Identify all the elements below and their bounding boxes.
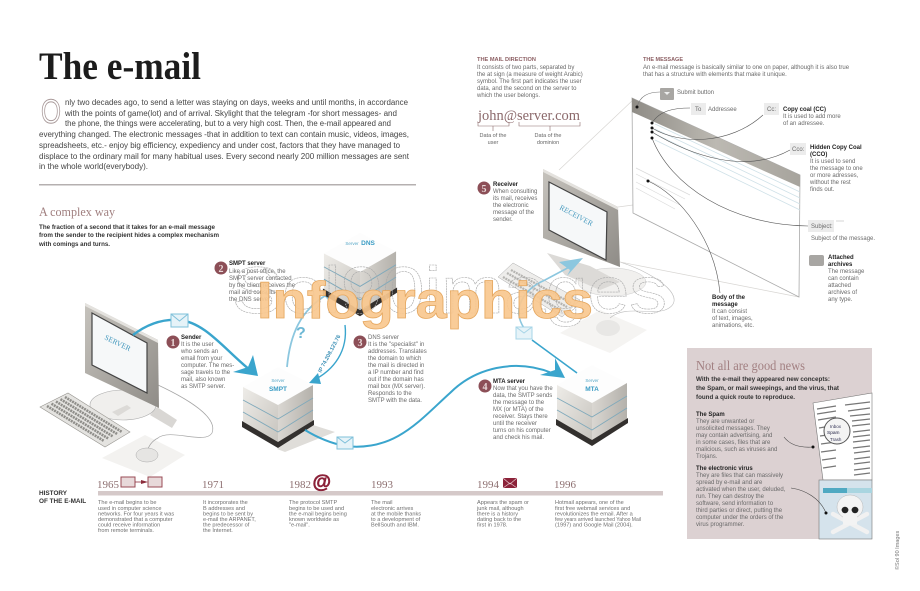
step 1: sender: It is the user <box>181 342 214 348</box>
step 5: receiver: its mail, receives <box>493 196 537 202</box>
1982 entry: The protocol SMTP <box>289 500 337 506</box>
timeline label: HISTORY <box>39 490 68 497</box>
1994 entry: Appears the spam or <box>477 500 529 506</box>
DNS server: Server <box>345 241 359 246</box>
MTA server: Server <box>585 378 599 383</box>
panel: the mail direction: symbol. The first part indicates the user <box>477 79 582 85</box>
step 2: SMPT server: Like a post office, the <box>229 269 286 275</box>
the virus text: virus programmer. <box>696 522 745 528</box>
callout: attached archives: archives <box>828 262 853 268</box>
panel intro: found a quick route to reproduce. <box>696 394 795 401</box>
1971 entry: It incorporates the <box>203 500 248 506</box>
step 4: MTA server: the message to the <box>493 400 545 406</box>
1993 entry: BellSouth and IBM. <box>371 522 419 528</box>
1993 entry: to a development of <box>371 517 421 523</box>
the virus text: run. They can destroy the <box>696 494 765 500</box>
panel: the mail direction: dominion <box>537 140 559 146</box>
callout: attached archives <box>809 255 865 303</box>
MTA server <box>556 365 628 446</box>
callout: copy coal: of an adressee. <box>783 121 825 127</box>
panel: not all are good news <box>687 348 872 539</box>
step 3: DNS server <box>354 335 427 404</box>
1996 entry: revolutionizes the email. After a <box>555 512 634 518</box>
sender computer illustration: SERVER <box>103 333 132 353</box>
spam inbox illustration <box>813 393 872 480</box>
step 1: sender: mail, also known <box>181 377 225 383</box>
arrow: SMPT to MTA <box>305 358 565 447</box>
icon: envelope SMPT to MTA <box>337 437 353 449</box>
step 5: receiver: 5 <box>482 184 486 195</box>
panel: the message heading: An e-mail message is basically similar to one on paper, although it is also true <box>643 65 850 71</box>
timeline bar <box>98 491 663 496</box>
arrow: MTA to receiver <box>519 258 583 373</box>
arrow: sender to SMPT <box>133 320 258 376</box>
callout: attached archives: any type. <box>828 297 853 303</box>
panel: the mail direction: THE MAIL DIRECTION <box>477 57 536 63</box>
panel: the mail direction <box>476 57 583 146</box>
panel: the mail direction: Data of the <box>480 133 506 139</box>
step 2: SMPT server: mail and consults <box>229 290 275 296</box>
callout: hidden copy coal: without the rest <box>809 180 851 186</box>
1965 entry: networks. For four years it was <box>98 512 174 518</box>
sender computer illustration <box>40 303 213 477</box>
step 2: SMPT server: by the client receives the <box>229 283 296 289</box>
complex way description: The fraction of a second that it takes for an e-mail message <box>39 224 216 231</box>
step 1: sender: computer. The mes- <box>181 363 234 369</box>
step 4: MTA server: MX (or MTA) of the <box>493 407 544 413</box>
arrow: DNS reply to SMPT with IP <box>309 325 345 384</box>
callout: copy coal: Copy coal (CC) <box>783 107 826 113</box>
step 3: DNS server: 3 <box>358 338 362 349</box>
1971 entry: 1971 <box>202 479 224 491</box>
1994 entry: there is a history <box>477 512 518 518</box>
1994 entry: first in 1978. <box>477 522 508 528</box>
panel: the mail direction: Data of the <box>535 133 561 139</box>
1971 entry: the predecessor of <box>203 522 250 528</box>
1994 entry <box>476 478 529 528</box>
the virus text: The electronic virus <box>696 466 753 472</box>
intro text block: with the points of game(lot) and of arrival. Skylight that the telegram -for short messages- and <box>64 109 397 118</box>
1965 entry: The e-mail begins to be <box>98 500 156 506</box>
callout: subject: Subject of the message. <box>811 236 875 242</box>
1993 entry <box>371 479 421 528</box>
icon: at sign: @ <box>312 472 331 493</box>
the spam text: unsolicited messages. They <box>696 426 770 432</box>
timeline label: OF THE E-MAIL <box>39 498 86 505</box>
step 4: MTA server: 4 <box>482 382 488 393</box>
watermark: Sol90images <box>232 253 667 327</box>
callout: hidden copy coal: finds out. <box>810 187 835 193</box>
1996 entry: Hotmail appears, one of the <box>555 500 624 506</box>
email window illustration <box>632 98 800 297</box>
1996 entry <box>554 479 641 528</box>
callout: submit button: Submit button <box>677 90 714 96</box>
step 4: MTA server: Now that you have the <box>493 386 553 392</box>
callout: hidden copy coal: Cco: <box>792 147 805 153</box>
question mark: ? <box>296 325 306 342</box>
callout: attached archives: archives of <box>828 290 857 296</box>
intro text block: displace to the ordinary mail for many habitual uses. Every second nearly 200 million messages are sent <box>39 152 410 161</box>
icon: envelope sender <box>171 314 188 327</box>
1965 entry: used in computer science <box>98 506 161 512</box>
DNS server: DNS <box>361 240 376 247</box>
callout: addressee: Addressee <box>708 107 737 113</box>
1993 entry: The mail <box>371 500 392 506</box>
1965 entry: could receive information <box>98 522 160 528</box>
panel: the message heading: that has a structure with elements that make it unique. <box>643 72 787 78</box>
1965 entry: demonstrated that a computer <box>98 517 173 523</box>
1996 entry: (1997) and Google Mail (2004). <box>555 522 633 528</box>
the spam text: Trojans. <box>696 454 718 460</box>
panel: the message heading <box>643 57 850 78</box>
intro text block: nly two decades ago, to send a letter was staying on days, weeks and until months, in accordance <box>65 98 409 107</box>
intro text block <box>39 93 410 171</box>
step 1: sender: who sends an <box>180 349 218 355</box>
callout: body of the message: message <box>712 302 738 308</box>
step 2: SMPT server: 2 <box>218 264 224 275</box>
step 1: sender: 1 <box>170 338 176 349</box>
callout: attached archives: The message <box>828 269 865 275</box>
step 5: receiver: message of the <box>493 210 535 216</box>
step 4: MTA server: and check his mail. <box>493 435 544 441</box>
arrow: DNS reply to SMPT with IP: IP 74.208.123.76 <box>317 334 342 374</box>
MTA server: MTA <box>585 386 599 393</box>
callout: body of the message: animations, etc. <box>712 323 754 329</box>
step 5: receiver: the electronic <box>493 203 529 209</box>
callout: copy coal: It is used to add more <box>783 114 841 120</box>
the spam text: They are unwanted or <box>696 419 754 425</box>
1982 entry: begins to be used and <box>289 506 344 512</box>
step 3: DNS server: a IP number and find <box>368 370 424 376</box>
callout: subject: Subject: <box>811 224 833 230</box>
callout: hidden copy coal: or more adresses, <box>810 173 859 179</box>
step 1: sender: as SMTP server. <box>181 384 226 390</box>
complex way description: with comings and turns. <box>38 241 110 248</box>
intro text block: spreadsheets, etc.- enjoy big efficiency, expediency and under cost, factors that they have managed to <box>39 141 401 150</box>
the spam text: may contain advertising, and <box>696 433 772 439</box>
1993 entry: electronic arrives <box>371 506 413 512</box>
SMPT server: Server <box>271 378 285 383</box>
panel: the mail direction: which the user belongs. <box>476 93 540 99</box>
panel: the mail direction: user <box>488 140 499 146</box>
step 3: DNS server: the domain to which <box>368 356 421 362</box>
callout: body of the message: It can consist <box>712 309 747 315</box>
panel: the mail direction: the at sign (a measure of weight Arabic) <box>477 72 583 78</box>
panel: the mail direction: data, and the second on the server to <box>477 86 577 92</box>
subheading: a complex way: A complex way <box>39 204 115 219</box>
1996 entry: first free webmail services and <box>555 506 630 512</box>
step 4: MTA server: MTA server <box>493 379 526 385</box>
1996 entry: 1996 <box>554 479 576 491</box>
intro text block: in the whole world(everybody). <box>39 162 148 171</box>
1965 entry: from remote terminals. <box>98 528 154 534</box>
the virus text: spread by e-mail and are <box>696 480 763 486</box>
1982 entry: 1982 <box>289 479 311 491</box>
guide lines from receiver to window <box>559 100 799 297</box>
1994 entry: dating back to the <box>477 517 521 523</box>
callout: addressee: To <box>695 107 702 113</box>
the virus text: computer under the orders of the <box>696 515 784 521</box>
1971 entry: the Internet. <box>203 528 233 534</box>
callout: submit button <box>636 88 714 108</box>
callout: hidden copy coal: Hidden Copy Coal <box>810 145 862 151</box>
panel heading: Not all are good news <box>696 359 805 374</box>
1993 entry: at the mobile thanks <box>371 512 421 518</box>
step 2: SMPT server <box>214 261 296 303</box>
the virus text <box>696 466 786 528</box>
drop cap: O <box>41 93 61 131</box>
step 1: sender: sage travels to the <box>181 370 231 376</box>
the virus text: They are files that can massively <box>696 473 783 479</box>
credit: ©Sol 90 Images <box>894 531 901 570</box>
callout: hidden copy coal: (CCO) <box>810 152 827 158</box>
callout: attached archives: can contain <box>828 276 859 282</box>
callout: attached archives: attached <box>828 283 851 289</box>
callout: attached archives: Attached <box>828 255 854 261</box>
step 1: sender: email from your <box>181 356 222 362</box>
intro text block: everything changed. The electronic messages -that in addition to text can contain music, videos, images, <box>39 130 409 139</box>
1965 entry: 1965 <box>97 479 120 491</box>
step 2: SMPT server: the DNS server. <box>229 297 272 303</box>
step 4: MTA server: turns on his computer <box>493 428 551 434</box>
1982 entry: known worldwide as <box>289 517 339 523</box>
the spam text: malicious, such as viruses and <box>696 447 777 453</box>
the spam text: The Spam <box>696 412 725 418</box>
1993 entry: 1993 <box>371 479 394 491</box>
intro text block: the phone, the things were accelerating, but to a very high cost. Then, the e-mail appeared and <box>65 119 391 128</box>
panel intro <box>696 376 840 401</box>
step 3: DNS server: It is the "specialist" in <box>368 342 424 348</box>
callout: body of the message: Body of the <box>712 295 746 301</box>
step 3: DNS server: out if the domain has <box>368 377 424 383</box>
step 4: MTA server: receiver. Stays there <box>493 414 548 420</box>
step 5: receiver <box>478 182 537 223</box>
the spam text: in some cases, files that are <box>696 440 771 446</box>
panel: the mail direction: It consists of two parts, separated by <box>477 65 574 71</box>
the virus text: software, send information to <box>696 501 774 507</box>
callout: hidden copy coal <box>650 130 863 193</box>
step 4: MTA server <box>478 379 553 441</box>
magnifier <box>824 418 850 444</box>
the virus text: activated when the user, deluded, <box>696 487 786 493</box>
step 3: DNS server: the mail is directed in <box>368 363 424 369</box>
callout: body of the message <box>646 180 754 329</box>
callout: body of the message: of text, images, <box>712 316 753 322</box>
DNS server <box>323 233 397 316</box>
1982 entry: "e-mail". <box>289 522 310 528</box>
arrow: SMPT query to DNS <box>287 289 334 367</box>
spam inbox illustration: Trash <box>830 437 842 442</box>
1971 entry: e-mail the ARPANET, <box>203 517 256 523</box>
step 4: MTA server: data, the SMTP sends <box>493 393 552 399</box>
callout: addressee <box>650 103 737 124</box>
step 3: DNS server: SMTP with the data. <box>368 398 422 404</box>
1982 entry: the e-mail begins being <box>289 512 347 518</box>
icon: envelope MTA to receiver <box>516 327 532 339</box>
virus window illustration <box>819 480 872 539</box>
icon: red envelope <box>503 478 517 488</box>
spam inbox illustration: Spam <box>827 430 840 436</box>
icon: skull and crossbones <box>833 495 867 532</box>
step 5: receiver: Receiver <box>493 182 519 188</box>
email address example: john@server.com <box>477 108 580 124</box>
step 2: SMPT server: SMPT server contacted <box>229 276 292 282</box>
complex way description <box>38 224 219 248</box>
the spam text <box>696 412 777 460</box>
the virus text: third parties or direct, putting the <box>696 508 783 514</box>
spam inbox illustration: Inbox <box>830 424 842 429</box>
watermark: Infographics <box>257 272 593 330</box>
callout: copy coal <box>650 103 841 139</box>
callout: hidden copy coal: It is used to send <box>810 159 855 165</box>
step 5: receiver: sender. <box>493 217 513 223</box>
panel: the message heading: THE MESSAGE <box>643 57 683 63</box>
panel intro: With the e-mail they appeared new concepts: <box>696 376 830 383</box>
1971 entry: B addresses and <box>203 506 245 512</box>
title: The e-mail <box>39 45 201 88</box>
receiver computer illustration: RECEIVER <box>558 203 595 228</box>
1996 entry: few years arrived launched Yahoo Mail <box>555 517 641 523</box>
step 3: DNS server: Responds to the <box>368 391 412 397</box>
SMPT server: SMPT <box>269 386 287 393</box>
history of the e-mail timeline <box>39 472 663 534</box>
step 3: DNS server: DNS server <box>368 335 399 341</box>
1965 entry <box>97 477 174 534</box>
step 3: DNS server: addresses. Translates <box>368 349 427 355</box>
callout: subject <box>650 136 875 242</box>
complex way description: from the sender to the recipient hides a complex mechanism <box>39 232 219 239</box>
step 1: sender: Sender <box>181 335 202 341</box>
callout: hidden copy coal: the message to one <box>810 166 863 172</box>
receiver computer illustration <box>498 169 674 353</box>
SMPT server <box>242 367 335 452</box>
1971 entry <box>202 479 256 534</box>
1994 entry: junk mail, although <box>476 506 524 512</box>
step 2: SMPT server: SMPT server <box>229 261 266 267</box>
callout: copy coal: Cc: <box>767 107 776 113</box>
step 4: MTA server: until the receiver <box>493 421 537 427</box>
step 1: sender <box>166 335 234 390</box>
1971 entry: begins to be sent by <box>203 512 253 518</box>
panel intro: the Spam, or mail sweepings, and the virus, that <box>696 385 840 392</box>
step 3: DNS server: mail box (MX server). <box>368 384 425 390</box>
1982 entry <box>289 472 347 528</box>
step 5: receiver: When consulting <box>493 189 537 195</box>
1994 entry: 1994 <box>477 479 500 491</box>
